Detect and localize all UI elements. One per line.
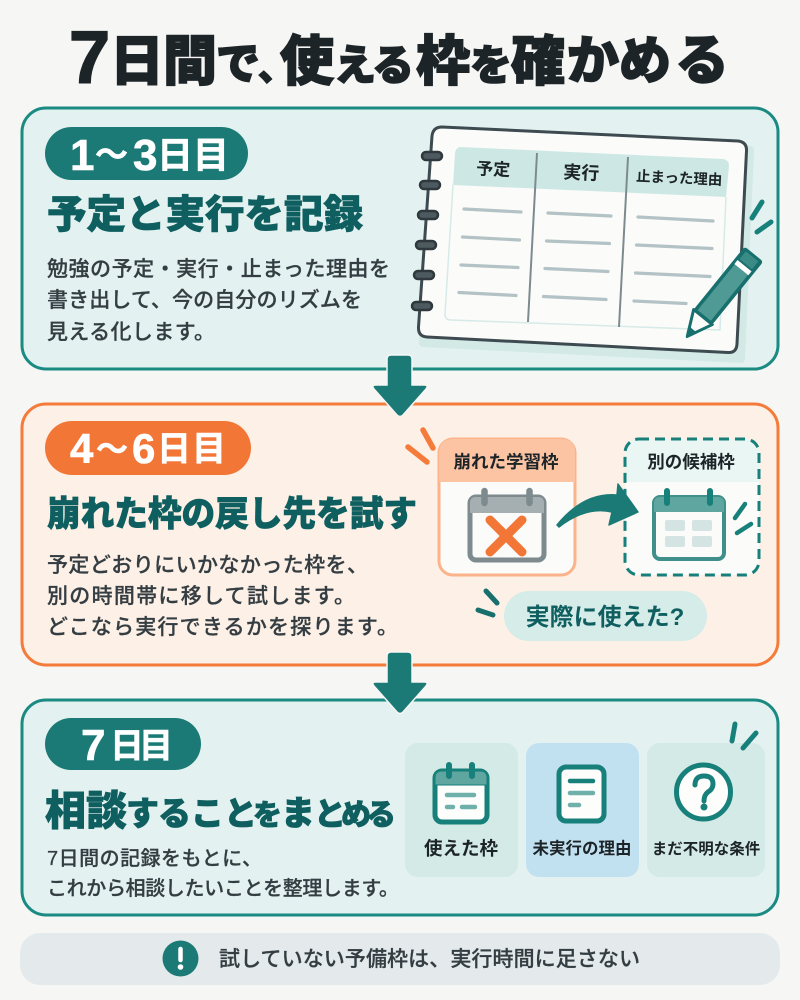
- card: unknown conditions: まだ不明な条件: [652, 839, 760, 858]
- badge: day 4-6: [45, 421, 251, 475]
- card: broken study slot: 崩れた学習枠: [454, 452, 559, 472]
- panel: day 4-6: [22, 404, 778, 665]
- badge: day 4-6: 日: [157, 430, 191, 468]
- badge: day 7: 目: [139, 728, 173, 766]
- badge: day 4-6: 〜: [96, 431, 128, 467]
- title: 日: [110, 32, 164, 92]
- heading: consult: す: [126, 795, 159, 832]
- text block: consult description: 7日間の記録をもとに、: [47, 847, 262, 870]
- card: reasons for not executing: 未実行の理由: [532, 839, 632, 858]
- card: unknown conditions: [647, 743, 765, 877]
- heading: consult: と: [314, 796, 346, 832]
- card: reasons for not executing: [526, 743, 639, 877]
- text block: record description: 勉強の予定・実行・止まった理由を: [47, 258, 390, 281]
- illustration: notebook with table: 止まった理由: [636, 168, 723, 189]
- sparks: unknown conditions: [732, 724, 756, 748]
- icon: document: [559, 767, 604, 821]
- heading: consult: ま: [281, 795, 315, 833]
- icon: cancelled calendar: [470, 491, 544, 560]
- badge: day 1-3: 1: [70, 131, 94, 180]
- heading: consult: 相: [45, 788, 86, 834]
- arrow: step 1 to step 2: [373, 355, 427, 416]
- footer note: 試していない予備枠は、実行時間に足さない: [219, 948, 640, 971]
- card: used slots: [405, 743, 518, 877]
- badge: day 4-6: 4: [70, 425, 94, 472]
- heading: consult: と: [224, 795, 257, 832]
- badge: day 7: 7: [81, 721, 105, 770]
- panel: day 7: [22, 700, 778, 915]
- text block: record description: 書き出して、今の自分のリズムを: [47, 289, 362, 312]
- text block: try description: どこなら実行できるかを探ります。: [47, 616, 398, 639]
- title: か: [567, 33, 619, 91]
- badge: day 7: 日: [110, 728, 144, 766]
- heading: consult: る: [366, 799, 396, 832]
- badge: day 1-3: [45, 127, 248, 180]
- card: used slots: 使えた枠: [424, 838, 498, 859]
- text block: record description: [47, 258, 390, 344]
- arrow: move to alternative slot: [557, 484, 638, 527]
- panel: day 1-3: [22, 108, 778, 369]
- title: 使: [280, 32, 334, 92]
- text block: try description: [47, 554, 398, 639]
- callout: did it work: 実際に使えた?: [526, 604, 684, 631]
- badge: day 1-3: 目: [193, 134, 229, 176]
- card: alternative slot: 別の候補枠: [647, 452, 735, 472]
- heading: consult: る: [158, 795, 191, 832]
- heading: consult: 談: [86, 788, 127, 834]
- illustration: notebook with table: [412, 127, 750, 359]
- title: る: [675, 31, 729, 91]
- heading: consult: を: [253, 800, 282, 832]
- text block: consult description: [47, 847, 399, 900]
- icon: calendar: [435, 765, 487, 822]
- callout: did it work: [504, 591, 707, 641]
- text block: record description: 見える化します。: [47, 321, 215, 344]
- title: え: [334, 42, 376, 89]
- badge: day 4-6: 6: [132, 425, 155, 472]
- title: で: [216, 40, 260, 89]
- heading: consult: こ: [191, 795, 224, 832]
- title: 確: [511, 32, 565, 92]
- sparks: pencil: [752, 202, 771, 232]
- icon: candidate calendar: [654, 491, 724, 559]
- icon: pencil: [677, 247, 763, 346]
- title: 間: [163, 32, 217, 92]
- heading: record: 予定と実行を記録: [47, 194, 363, 237]
- sparks: broken slot: [408, 430, 433, 462]
- title: を: [470, 42, 512, 89]
- title: る: [372, 42, 414, 89]
- badge: day 4-6: 目: [192, 430, 226, 468]
- heading: consult: め: [341, 799, 371, 832]
- text block: try description: 別の時間帯に移して試します。: [47, 585, 355, 608]
- illustration: notebook with table: 予定: [476, 159, 511, 180]
- title: め: [619, 33, 671, 91]
- title: 、: [258, 47, 294, 88]
- illustration: notebook with table: 実行: [563, 162, 600, 184]
- badge: day 7: [45, 718, 201, 770]
- card: alternative slot: [625, 439, 759, 575]
- badge: day 1-3: 3: [133, 131, 157, 180]
- heading: try alternatives: 崩れた枠の戻し先を試す: [47, 495, 417, 534]
- title: 7: [69, 16, 110, 99]
- icon: exclamation: [162, 940, 198, 976]
- text block: try description: 予定どおりにいかなかった枠を、: [47, 554, 368, 577]
- sparks: candidate calendar: [735, 504, 751, 533]
- title: 枠: [416, 32, 470, 92]
- icon: question mark: [676, 765, 730, 819]
- arrow: step 2 to step 3: [373, 652, 427, 714]
- badge: day 1-3: 〜: [95, 136, 128, 173]
- footer note: [20, 933, 780, 985]
- text block: consult description: これから相談したいことを整理します。: [47, 877, 399, 900]
- sparks: question: [478, 591, 497, 615]
- badge: day 1-3: 日: [157, 134, 193, 176]
- card: broken study slot: [439, 439, 575, 575]
